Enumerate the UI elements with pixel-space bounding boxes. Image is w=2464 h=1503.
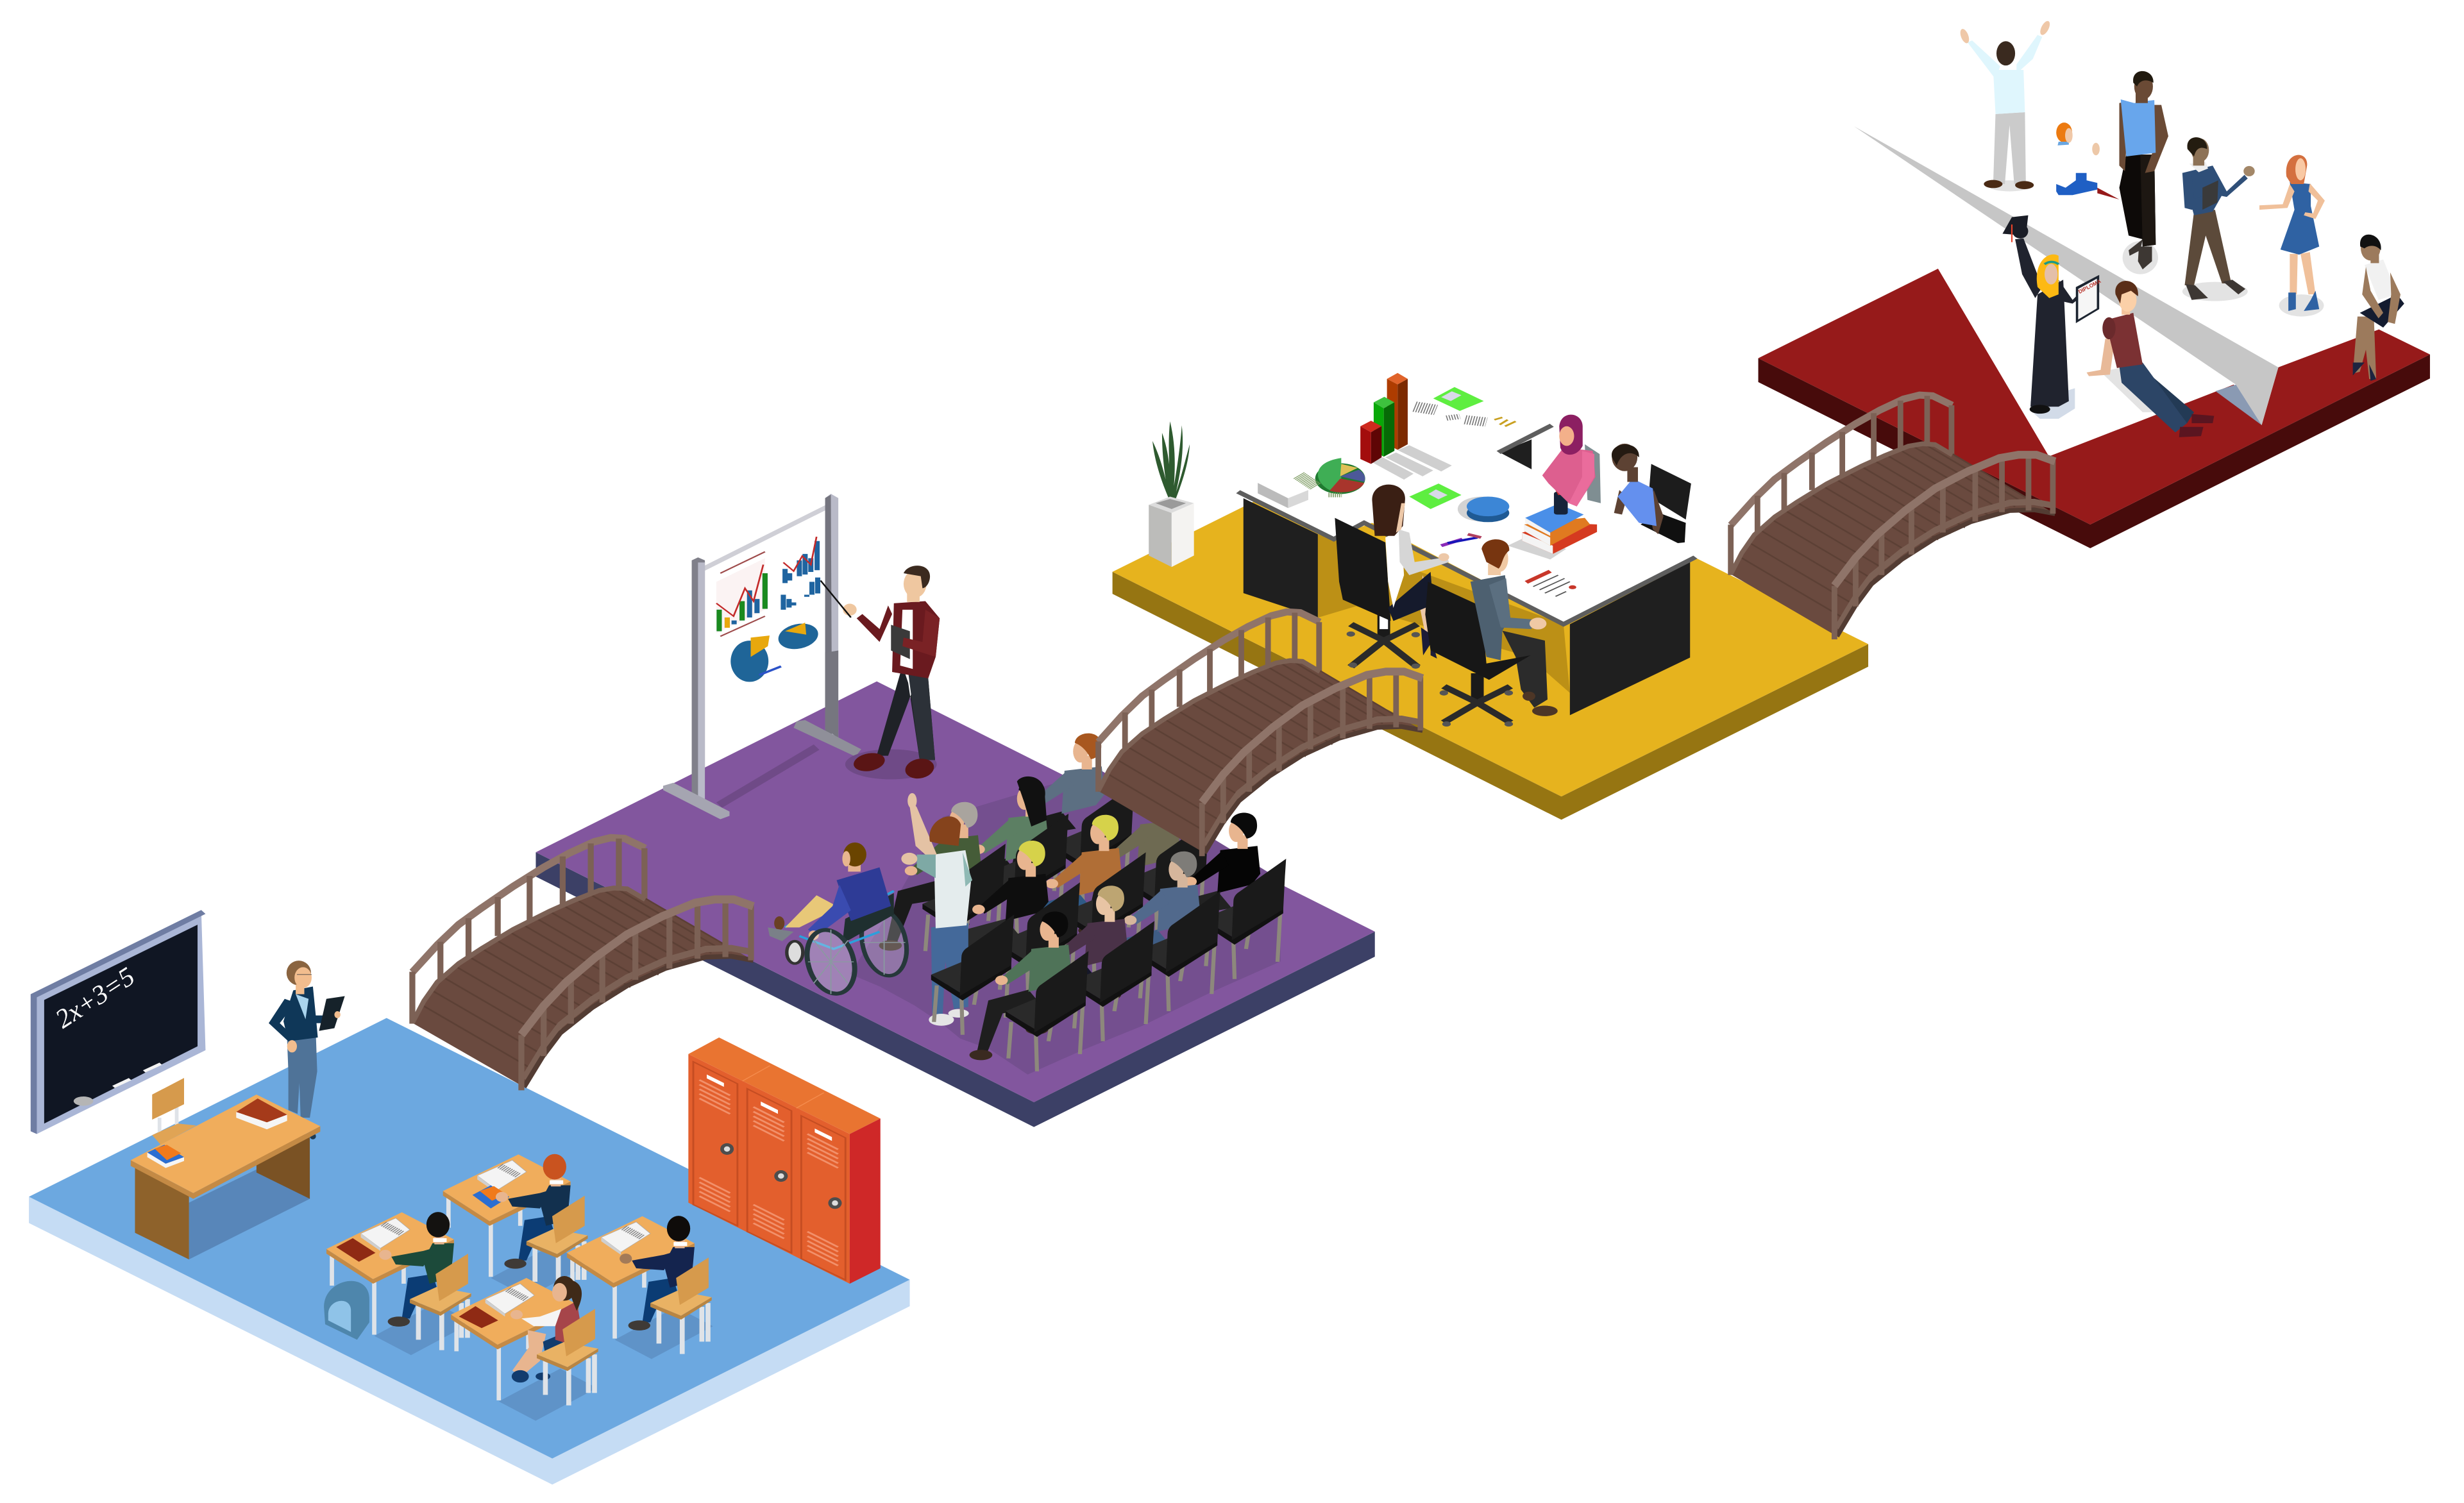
- panel: red graduation platform with white folded sheet: [1759, 126, 2430, 548]
- chart: pies: [730, 619, 823, 682]
- woman in chair: [1335, 485, 1449, 669]
- chalkboard equation: 2x+3=5: [50, 962, 140, 1034]
- graduate in hijab: [2002, 215, 2099, 419]
- graduation scene: [1959, 20, 2404, 437]
- standing student: [901, 793, 972, 1026]
- redhead with blue cap: [2056, 122, 2120, 199]
- meeting scene: [1149, 365, 1696, 726]
- pie chart: [1299, 458, 1365, 495]
- classroom scene: [31, 910, 881, 1421]
- student desk back: [443, 1154, 589, 1297]
- teacher chair: [152, 1078, 196, 1145]
- wheelchair user: [768, 843, 912, 996]
- panel: yellow meeting platform: [1113, 419, 1868, 819]
- man in chair: [1425, 539, 1558, 726]
- book stack: [1508, 482, 1597, 559]
- student desk right: [567, 1216, 713, 1359]
- bridge: lecture to meeting: [1099, 612, 1422, 856]
- man in sweater: [2182, 137, 2255, 301]
- chalkboard: [31, 910, 205, 1134]
- chart: right bar charts: [783, 537, 818, 610]
- bridge: classroom to lecture: [412, 837, 754, 1090]
- printer box: [1258, 483, 1308, 508]
- teacher: [269, 961, 345, 1139]
- panel: blue classroom platform: [29, 1018, 910, 1484]
- backpack: [324, 1281, 369, 1339]
- seated woman on edge: [2353, 235, 2404, 381]
- 3D bar chart: [1360, 373, 1452, 480]
- audience row 1: [970, 812, 1286, 1071]
- audience row 2: [947, 787, 1209, 1003]
- woman in blue dress: [2259, 155, 2325, 317]
- student desk left: [326, 1212, 473, 1355]
- blue disc: [1458, 496, 1509, 522]
- lockers: [688, 1037, 881, 1284]
- hijab woman: [1542, 415, 1601, 507]
- dark-skinned man: [1612, 444, 1691, 543]
- student desk front with girl: [451, 1276, 598, 1421]
- bridge: meeting to graduation: [1731, 395, 2055, 639]
- audience row 3: [879, 734, 1135, 964]
- presenter: [820, 566, 940, 782]
- whiteboard: [663, 494, 861, 819]
- teacher desk: [131, 1095, 320, 1259]
- desk: [1238, 365, 1696, 715]
- documents: [1409, 387, 1576, 596]
- seated man: [2087, 281, 2214, 437]
- panel: purple lecture platform: [536, 682, 1375, 1127]
- plant: [1149, 421, 1194, 567]
- lecture scene: [663, 494, 1286, 1071]
- man in blue tank: [2120, 71, 2168, 274]
- man with arms raised: [1959, 20, 2052, 191]
- diploma label: DIPLOMA: [2077, 278, 2102, 295]
- chart: left bar chart: [716, 551, 765, 636]
